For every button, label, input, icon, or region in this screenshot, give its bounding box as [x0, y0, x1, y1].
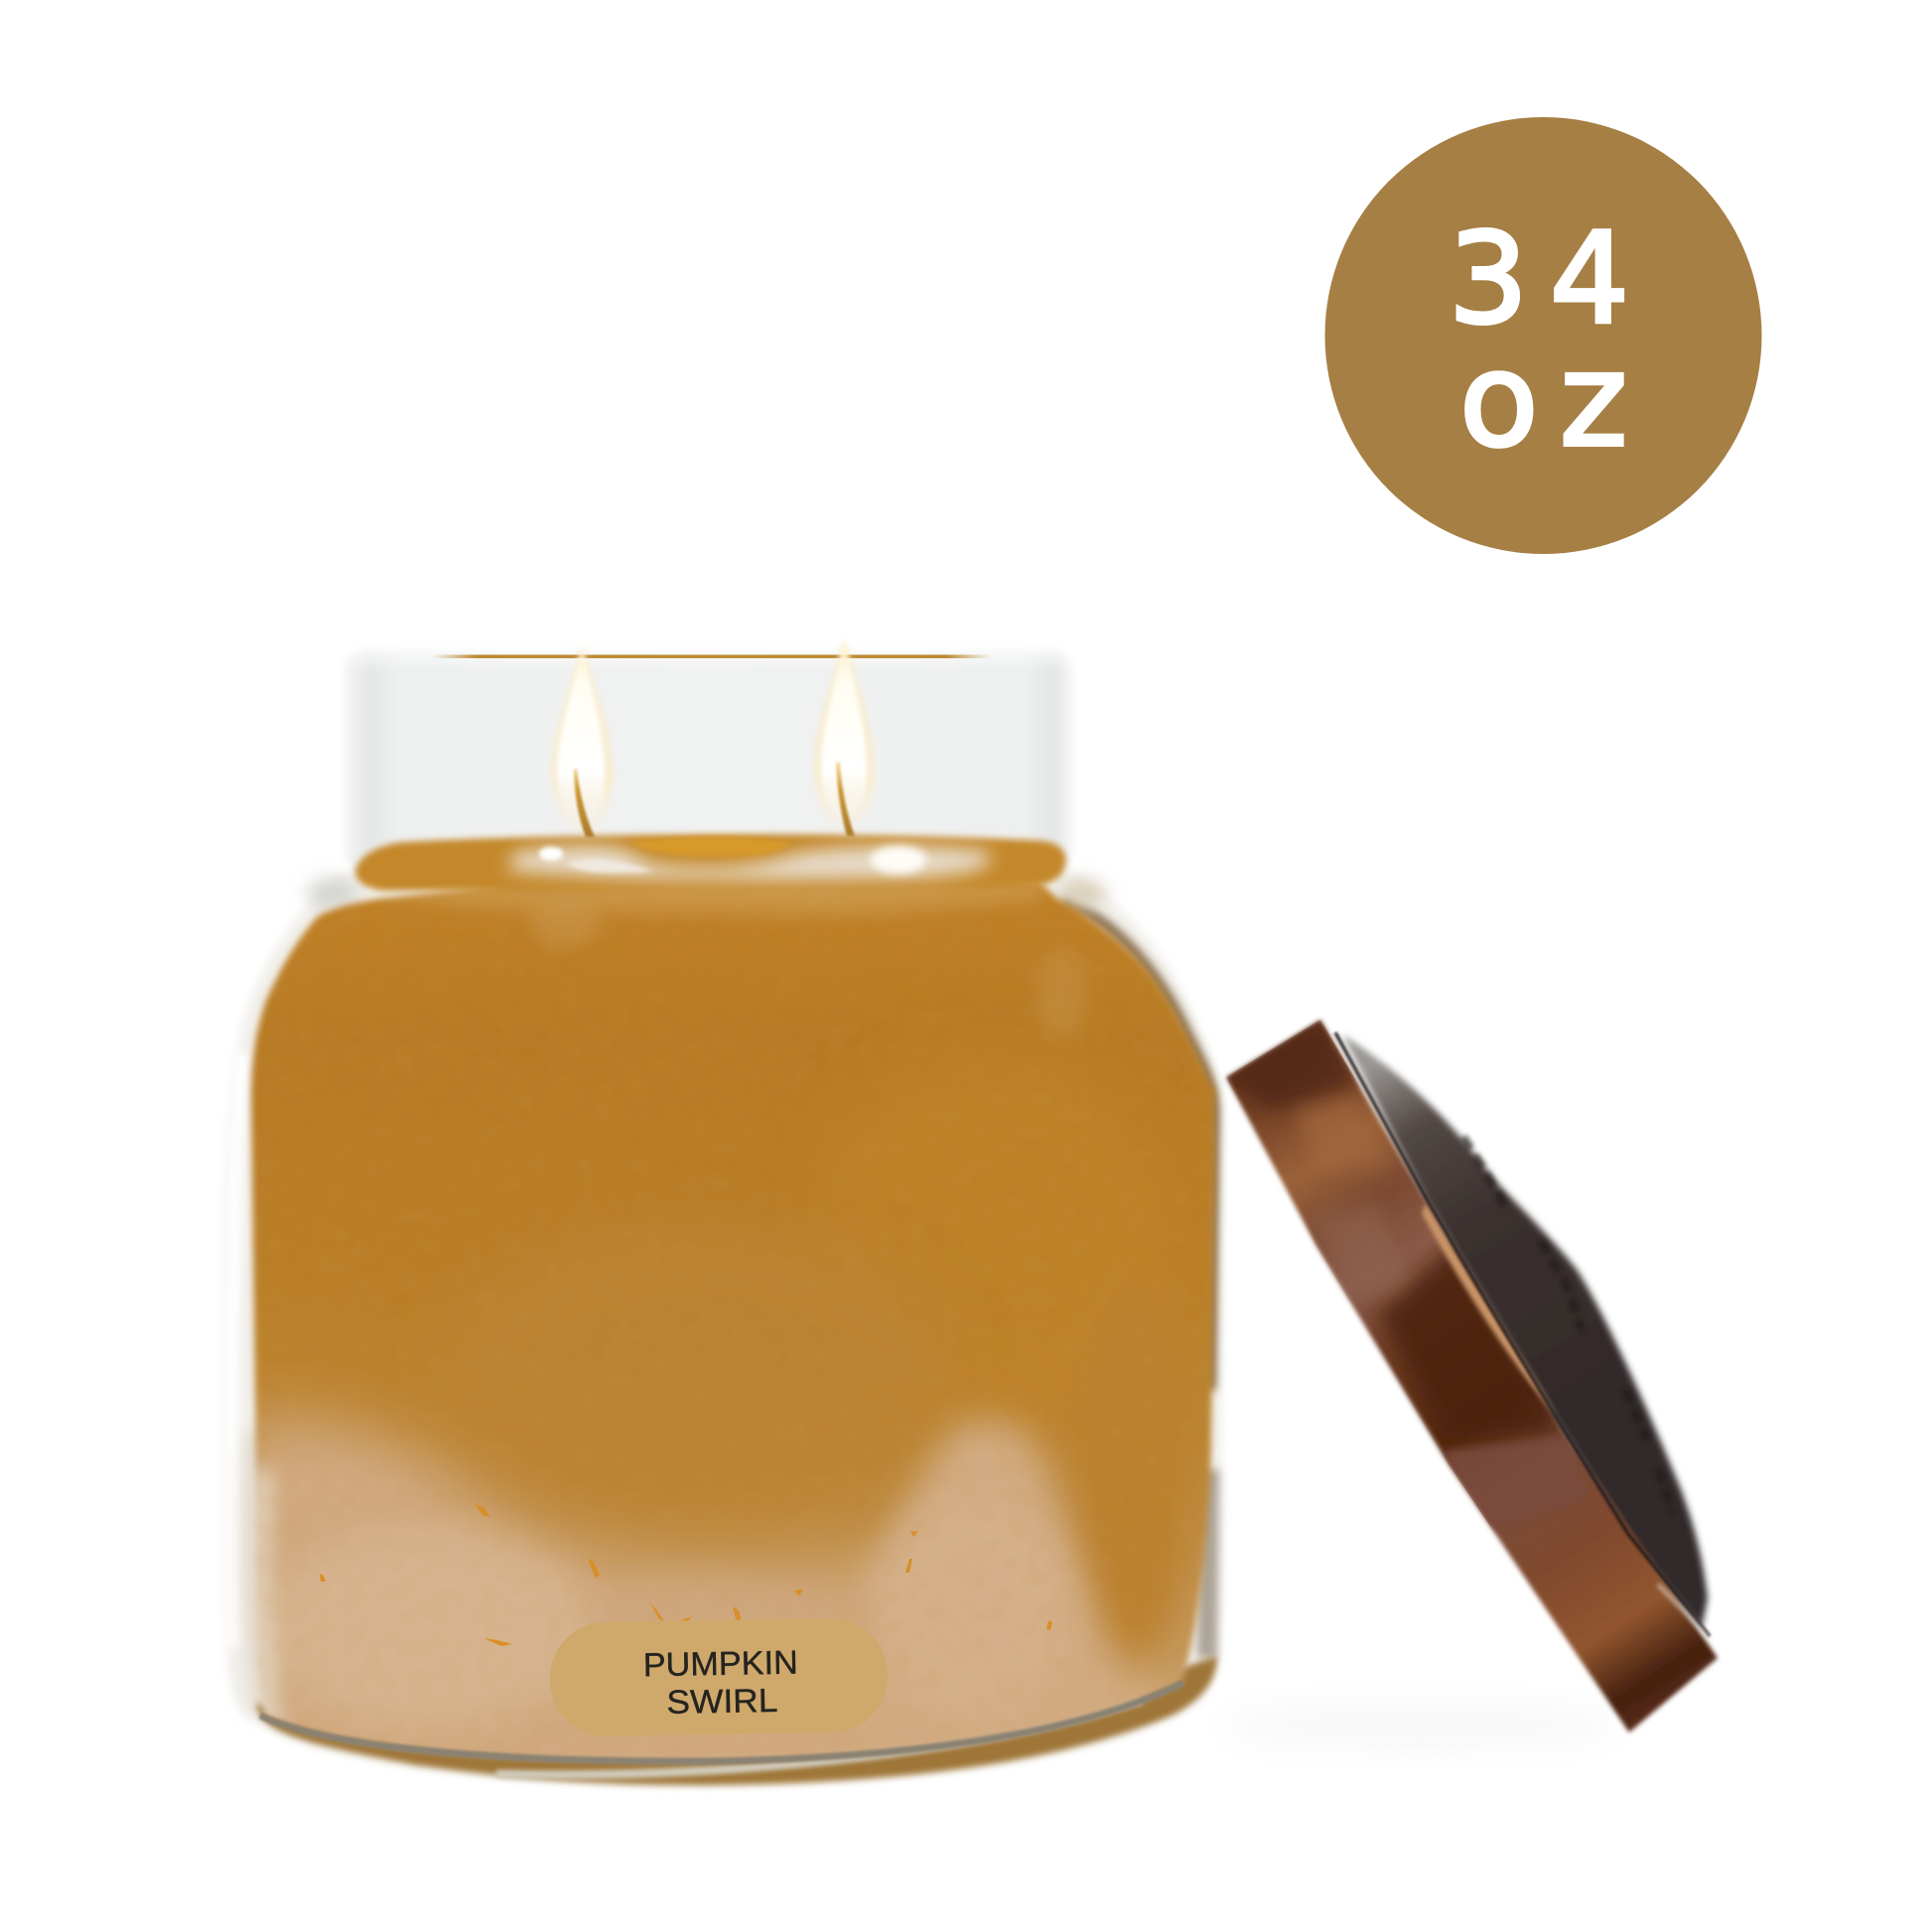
band warm sheen [1299, 1103, 1378, 1164]
shoulder right glow [1036, 947, 1088, 1038]
size badge [1324, 117, 1761, 554]
jar base [256, 1656, 1217, 1785]
wick left [574, 769, 595, 837]
scent label: SWIRL [666, 1683, 778, 1722]
shoulder grey left [307, 878, 358, 909]
glass right grey edge [1207, 1469, 1209, 1658]
band dark top corner [1226, 1020, 1360, 1112]
band mauve sheen [1311, 1201, 1415, 1301]
embossed lid pattern [1463, 1137, 1673, 1514]
wax mottling [260, 1526, 488, 1610]
bright band right [1073, 1446, 1199, 1666]
flame right [814, 638, 875, 836]
copper lid [1226, 1020, 1718, 1732]
base pale band [496, 1700, 1142, 1775]
sand coloured lower wax, left [238, 1418, 874, 1797]
wick right [836, 762, 855, 836]
pale left fade [248, 1469, 283, 1727]
band lower mauve [1442, 1440, 1551, 1533]
lid highlight [1422, 1203, 1555, 1415]
band dark patch [1380, 1241, 1559, 1440]
candle jar [223, 638, 1231, 1797]
warm mid wax [804, 1042, 1181, 1440]
shoulder tone right [1058, 880, 1106, 907]
glass neck [307, 640, 1106, 909]
pale shoulder band [401, 885, 1049, 920]
jar base inner line [260, 1683, 1183, 1761]
wax speckle [961, 1008, 1147, 1070]
glass right dark edge [1062, 901, 1214, 1390]
lid dark face [1342, 1035, 1708, 1628]
glass jar body [223, 874, 1222, 1785]
badge text: 34: 34 [1449, 206, 1629, 351]
pale streak [530, 899, 602, 947]
orange flecks [320, 1504, 1052, 1646]
melt pool [629, 837, 791, 856]
glass left highlight [232, 1052, 242, 1648]
glass lower left tone [255, 1430, 266, 1713]
wax top flange [355, 834, 1065, 892]
lid seam [1335, 1033, 1710, 1636]
lid copper band [1226, 1020, 1718, 1732]
wax body [238, 854, 1231, 1797]
product image: candle with lid and size badge [225, 117, 1761, 1791]
badge text: oz: oz [1459, 325, 1627, 476]
lid pale edge [1658, 1585, 1710, 1638]
rim highlight line [431, 655, 992, 658]
melted wax reflections [506, 846, 990, 880]
flame left [551, 645, 613, 837]
scent label [549, 1617, 889, 1737]
floor shadow [1221, 1712, 1618, 1739]
sand coloured lower wax, right [854, 1420, 1186, 1797]
label text: PUMPKIN [642, 1645, 798, 1684]
